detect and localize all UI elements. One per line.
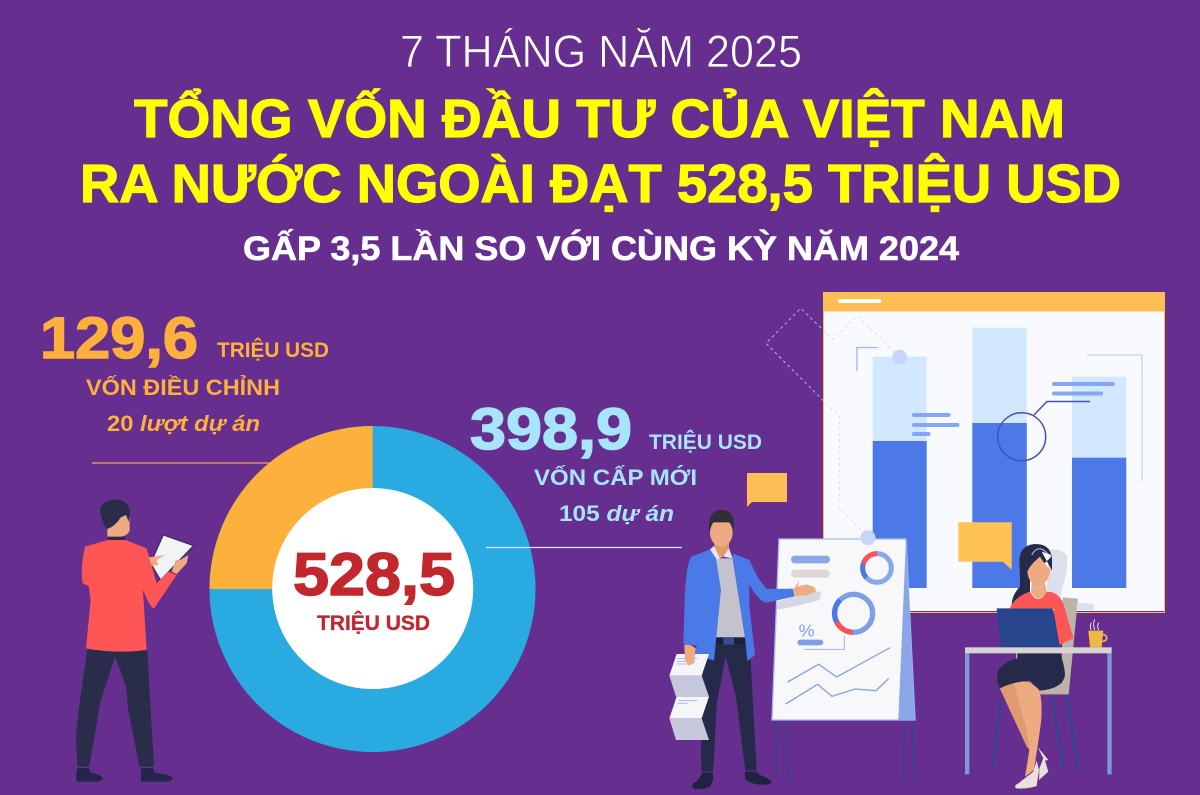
chair legs (992, 695, 1078, 770)
flip chart board (772, 539, 915, 720)
stat: new capital (470, 397, 762, 526)
flip chart legs (776, 720, 915, 778)
title line 3: GẤP 3,5 LẦN SO VỚI CÙNG KỲ NĂM 2024 (243, 230, 959, 268)
bar 3 annotation (1052, 382, 1115, 396)
board background (823, 292, 1165, 613)
wall shadow (1047, 549, 1094, 610)
donut centre (272, 488, 473, 689)
heading block (80, 26, 1121, 268)
neck (1031, 583, 1047, 598)
hair (1012, 544, 1052, 605)
collar (108, 537, 125, 540)
segment: new capital (210, 426, 536, 752)
figure: presenter with flip chart (669, 510, 915, 789)
shoes (692, 772, 772, 789)
bar 3 (1072, 377, 1126, 588)
title line 2: RA NƯỚC NGOÀI ĐẠT 528,5 TRIỆU USD (80, 153, 1121, 214)
connector dot top (892, 350, 907, 365)
centre unit: TRIỆU USD (317, 611, 430, 635)
mug (1088, 619, 1107, 647)
trousers (701, 638, 757, 772)
desk legs (965, 653, 1112, 774)
hair (100, 499, 130, 529)
unit: TRIỆU USD (217, 338, 329, 362)
value: 398,9 (470, 397, 632, 462)
papers (669, 654, 709, 740)
collar (710, 546, 733, 559)
neck (714, 540, 729, 558)
right figures leader line (486, 546, 682, 548)
bar 1 annotation (912, 413, 960, 436)
panel: bar chart board (823, 292, 1165, 613)
dashed connector lines (766, 308, 894, 537)
jacket (683, 549, 794, 661)
hair (709, 510, 734, 532)
shoes (1015, 747, 1048, 789)
neck and ear (107, 511, 130, 537)
paper hand (684, 645, 696, 666)
pointing hand (794, 580, 816, 596)
hand shadow (777, 592, 822, 610)
headband and chin (1032, 549, 1047, 588)
connector dot bottom (860, 530, 875, 545)
clipboard (151, 535, 193, 580)
bar 2 (972, 328, 1027, 588)
corner brackets (857, 348, 1142, 481)
speech bubble small (747, 473, 787, 507)
percent sign: % (799, 621, 815, 641)
magnifier callout (998, 402, 1090, 461)
donut chart (210, 426, 536, 752)
figure: woman at desk (965, 544, 1112, 789)
trousers (76, 649, 154, 767)
line chart (786, 648, 890, 704)
board pills (791, 556, 830, 578)
stat: adjusted capital (40, 306, 329, 436)
belt (716, 637, 745, 645)
segment: adjusted capital (210, 426, 373, 589)
top (1010, 592, 1073, 645)
laptop (997, 608, 1060, 647)
title line 1: TỔNG VỐN ĐẦU TƯ CỦA VIỆT NAM (134, 88, 1065, 149)
percent bracket (804, 636, 844, 649)
desk top (965, 647, 1112, 653)
centre value: 528,5 (293, 541, 455, 608)
skirt (997, 653, 1065, 691)
value: 129,6 (40, 306, 198, 371)
flip chart side (898, 539, 915, 720)
face (710, 519, 733, 547)
thigh and lower leg (999, 681, 1042, 750)
face (1027, 557, 1051, 587)
shirt (716, 558, 745, 637)
left figures panel line (92, 462, 276, 464)
subtitle: period: 7 THÁNG NĂM 2025 (400, 26, 802, 77)
project count: 105 dự án (559, 501, 674, 526)
speech bubble large (958, 522, 1012, 570)
project count: 20 lượt dự án (107, 411, 260, 436)
hands (149, 555, 188, 574)
board header pill (838, 299, 881, 303)
label: VỐN CẤP MỚI (534, 464, 697, 490)
sweater (82, 540, 177, 652)
bar 1 (873, 357, 927, 588)
label: VỐN ĐIỀU CHỈNH (86, 374, 280, 400)
small donut (863, 554, 891, 582)
percent pill (797, 640, 823, 645)
unit: TRIỆU USD (649, 430, 762, 454)
large donut (835, 594, 873, 632)
shoes (76, 768, 173, 782)
chair (1016, 597, 1078, 694)
figure: man with clipboard (76, 499, 193, 782)
